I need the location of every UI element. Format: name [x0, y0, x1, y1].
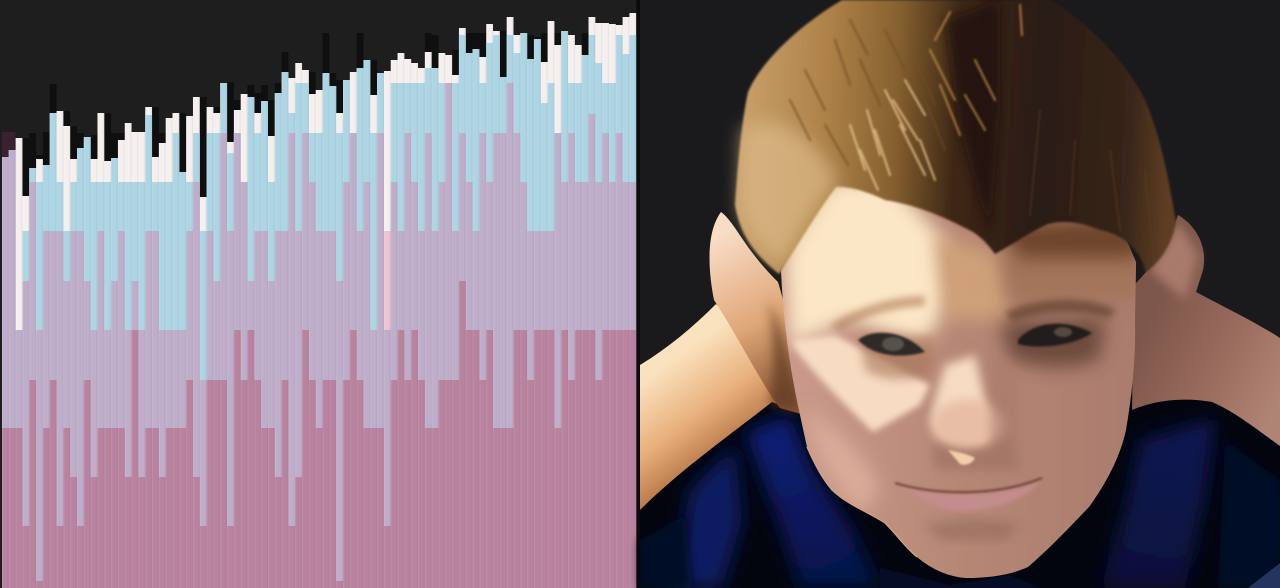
hair: darker strands	[790, 20, 945, 165]
hair	[735, 0, 1176, 274]
mouth line	[895, 478, 1042, 492]
iris highlights	[882, 337, 904, 351]
left eye	[858, 333, 925, 356]
gutter between panels	[636, 0, 640, 588]
right arm and hand	[1132, 215, 1280, 446]
hair: lit strands	[850, 80, 935, 190]
right eye socket shadow	[1000, 318, 1105, 367]
nose tip	[932, 399, 1004, 451]
lips	[905, 482, 1040, 511]
forehead shadow right	[996, 244, 1136, 306]
series: pink	[2, 281, 636, 588]
panel: photo of boy covering his ears	[640, 0, 1280, 588]
left arm	[640, 304, 798, 510]
jaw rim light	[807, 447, 917, 557]
hair: crown highlights	[930, 5, 1022, 135]
nose glint	[948, 450, 975, 465]
shirt	[640, 395, 1280, 588]
forehead transition	[935, 235, 1010, 320]
face	[781, 185, 1136, 578]
left hand	[710, 212, 801, 414]
series: white	[2, 13, 636, 588]
chin shadow	[925, 520, 1020, 540]
series: dark purple corner	[2, 132, 16, 157]
lit cheek	[792, 335, 930, 432]
forehead light	[780, 180, 950, 345]
nose shadow	[986, 400, 1010, 444]
hair: right side fringe strands	[1030, 110, 1152, 250]
series: lilac	[2, 83, 636, 588]
series: light pink bar	[384, 231, 391, 330]
bar separators overlay	[2, 13, 636, 588]
series: black overshoot	[2, 13, 636, 588]
hand shading	[768, 300, 800, 412]
panel: chart background	[0, 0, 640, 588]
series: light blue	[2, 31, 636, 588]
lower cheek glow	[805, 410, 880, 515]
left brow	[830, 296, 925, 332]
hair: dark crown patch	[945, 0, 1000, 235]
left eye socket shadow	[860, 335, 935, 379]
nose bridge highlight	[932, 355, 985, 442]
photo background	[640, 0, 1280, 588]
under-nose shadow	[932, 441, 1016, 470]
right eye	[1018, 324, 1092, 347]
right brow	[1005, 300, 1115, 322]
hair: sunlit lower left	[740, 122, 838, 265]
chart: stacked bars	[2, 13, 636, 588]
right hand highlight	[1150, 222, 1198, 300]
